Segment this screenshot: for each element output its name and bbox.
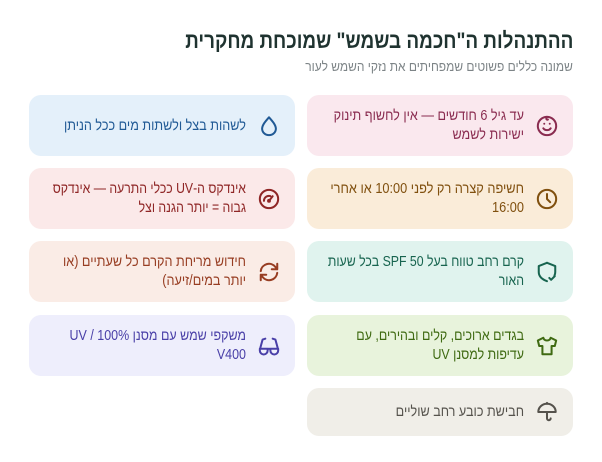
- icon: gauge: [258, 188, 280, 210]
- text: UV index: גבוה = יותר הגנה וצל: [139, 200, 246, 216]
- card: timing: [307, 168, 573, 229]
- text: UV index: [53, 181, 246, 216]
- text: clothing: בגדים ארוכים, קלים ובהירים, עם: [356, 328, 524, 344]
- card: clothing: [307, 315, 573, 376]
- text: timing: חשיפה קצרה רק לפני 10:00 או אחרי: [330, 181, 524, 197]
- card: reapply: [29, 241, 295, 302]
- text: timing: 16:00: [492, 200, 524, 216]
- card: shade: [29, 95, 295, 156]
- text: shade: לשהות בצל ולשתות מים ככל הניתן: [64, 118, 246, 134]
- icon: shield check: [538, 262, 556, 282]
- icon: water drop: [261, 116, 277, 136]
- text: clothing: [356, 328, 524, 363]
- text: sunglasses: משקפי שמש עם מסנן 100% / UV: [70, 328, 246, 344]
- card: infants: [307, 95, 573, 156]
- icon: refresh arrows: [260, 262, 278, 282]
- text: sunglasses: [70, 328, 246, 363]
- text: clothing: עדיפות למסנן UV: [432, 347, 524, 363]
- text: sunscreen: האור: [499, 273, 524, 289]
- text: hat: חבישת כובע רחב שוליים: [396, 404, 524, 420]
- text: reapply: חידוש מריחת הקרם כל שעתיים (או: [63, 254, 246, 270]
- text: infants: ישירות לשמש: [452, 127, 524, 143]
- card: hat: [307, 388, 573, 436]
- card: sunglasses: [29, 315, 295, 376]
- text: infants: עד גיל 6 חודשים — אין לחשוף תינוק: [334, 108, 524, 124]
- card: sunscreen: [307, 241, 573, 302]
- title: ההתנהלות ה"חכמה בשמש" שמוכחת מחקרית: [185, 28, 573, 53]
- text: UV index: אינדקס ה-UV ככלי התרעה — אינדקס: [53, 181, 246, 197]
- icon: umbrella: [537, 402, 557, 422]
- icon: clock: [536, 188, 558, 210]
- text: timing: [330, 181, 524, 216]
- text: sunglasses: V400: [217, 347, 246, 363]
- icon: baby face: [536, 116, 558, 136]
- card: UV index: [29, 168, 295, 229]
- text: sunscreen: [328, 254, 524, 289]
- text: reapply: יותר במים/זיעה): [162, 273, 246, 289]
- subtitle: שמונה כללים פשוטים שמפחיתים את נזקי השמש לעור: [305, 59, 573, 74]
- icon: shirt: [536, 336, 558, 356]
- text: sunscreen: קרם רחב טווח בעל SPF 50 בכל שעות: [328, 254, 524, 270]
- icon: sunglasses: [258, 338, 280, 356]
- text: infants: [334, 108, 524, 143]
- text: reapply: [63, 254, 246, 289]
